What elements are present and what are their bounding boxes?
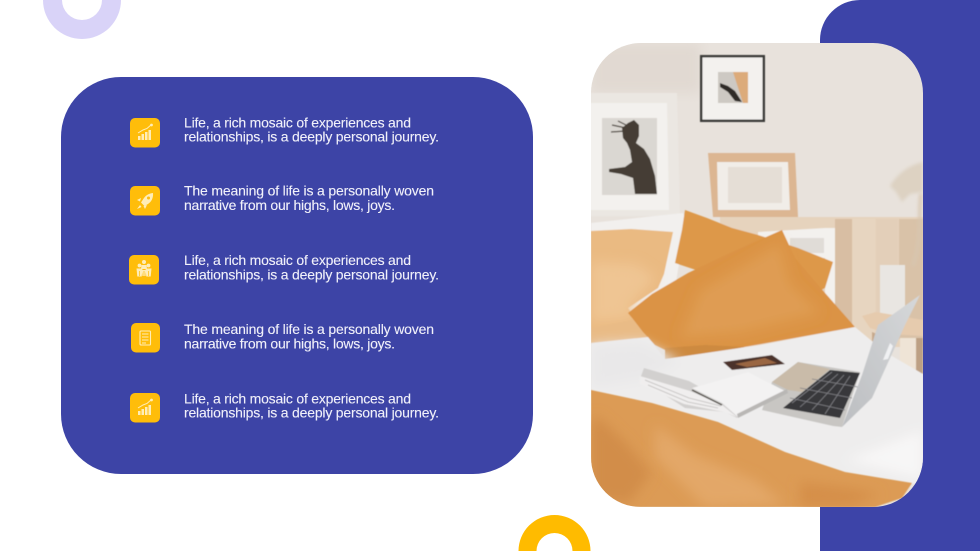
- text: item 1: Life, a rich mosaic of experiences and: [184, 114, 411, 130]
- list item 1: [130, 114, 439, 148]
- list item 2: [130, 183, 434, 216]
- text: item 4: The meaning of life is a personally woven: [184, 321, 434, 337]
- text: item 1: [184, 114, 439, 145]
- open notebook: [640, 368, 788, 418]
- icon: growth chart: [130, 393, 160, 422]
- phone: [723, 355, 785, 370]
- icon: document notes: [131, 323, 160, 352]
- text: item 5: [184, 390, 439, 421]
- photo: bedroom scene with laptop: [585, 43, 925, 507]
- orange blanket: [591, 390, 912, 507]
- pillow: front orange: [628, 230, 855, 360]
- bed sheet: [591, 327, 923, 484]
- text: item 4: narrative from our highs, lows, joys.: [184, 335, 395, 351]
- panel: main blue list panel: [61, 77, 533, 474]
- text: item 2: [184, 183, 434, 213]
- text: item 4: [184, 321, 434, 351]
- text: item 1: relationships, is a deeply personal journey.: [184, 129, 439, 145]
- laptop: [762, 295, 920, 427]
- list item 3: [129, 252, 439, 284]
- text: item 5: relationships, is a deeply personal journey.: [184, 405, 439, 421]
- list item 5: [130, 390, 439, 422]
- decorative ring: lavender top-left: [43, 0, 121, 39]
- text: item 5: Life, a rich mosaic of experiences and: [184, 390, 411, 406]
- picture frame: left silhouette: [591, 94, 676, 210]
- text: item 2: The meaning of life is a personally woven: [184, 183, 434, 199]
- vase and side table: [862, 265, 923, 378]
- text: item 3: relationships, is a deeply personal journey.: [184, 266, 439, 282]
- wood panelling: [720, 217, 925, 347]
- text: item 2: narrative from our highs, lows, joys.: [184, 197, 395, 213]
- picture frame: dark with small print: [700, 55, 765, 122]
- white pillow: [591, 213, 685, 312]
- icon: rocket: [130, 186, 160, 216]
- pillow: back orange: [674, 210, 834, 290]
- pillow: left peach: [591, 228, 674, 328]
- picture frame: light wood: [708, 153, 798, 217]
- white bed frame: [758, 228, 836, 304]
- icon: group of people: [129, 255, 159, 284]
- list item 4: [131, 321, 434, 352]
- dried plant: [890, 162, 923, 218]
- right blue background panel: [820, 0, 980, 551]
- text: item 3: [184, 252, 439, 282]
- text: item 3: Life, a rich mosaic of experiences and: [184, 252, 411, 268]
- icon: growth chart: [130, 118, 160, 148]
- decorative ring: yellow bottom-centre: [518, 515, 590, 551]
